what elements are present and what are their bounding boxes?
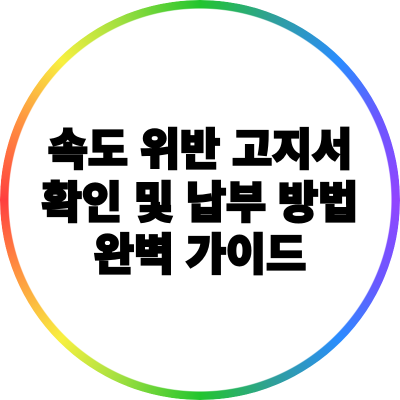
title — [41, 126, 358, 280]
title: 속도 위반 고지서 — [48, 127, 352, 175]
title: 완벽 가이드 — [94, 232, 306, 280]
title: 확인 및 납부 방법 — [42, 180, 358, 228]
